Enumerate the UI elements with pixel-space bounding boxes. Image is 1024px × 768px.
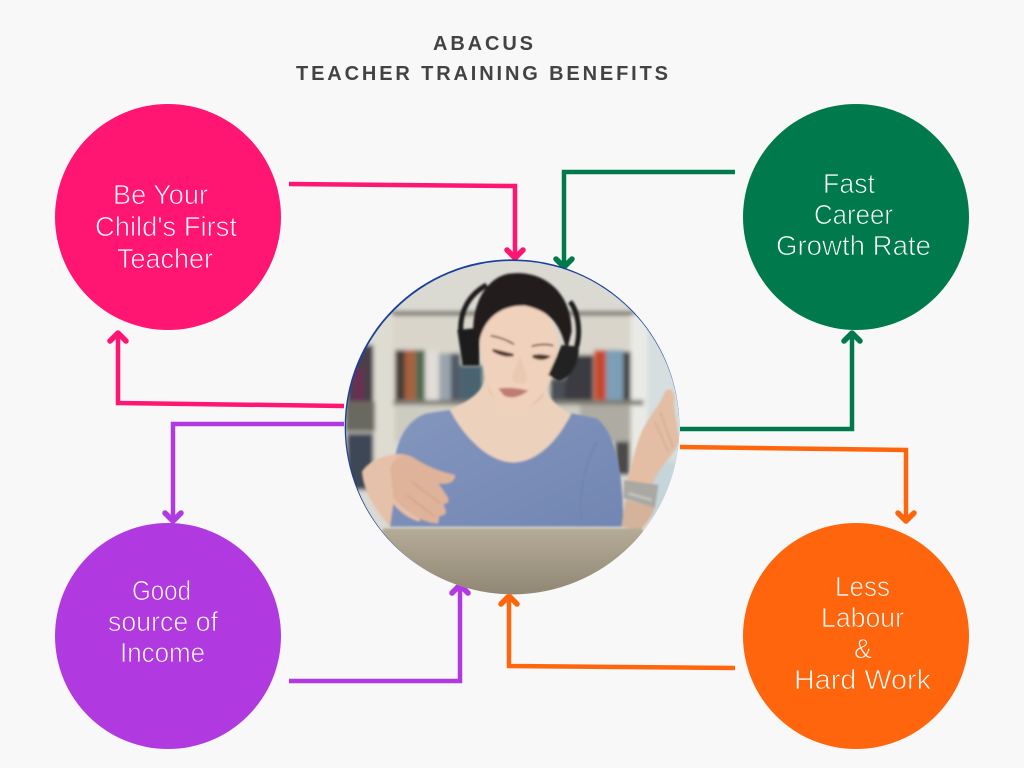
watch xyxy=(623,480,658,508)
left hand xyxy=(390,455,455,523)
arrow: purple from photo to income circle xyxy=(165,424,344,521)
photo: woman with headphones at laptop xyxy=(340,255,687,602)
title: ABACUS xyxy=(433,33,533,55)
chest and neck xyxy=(450,375,571,462)
circle: Less Labour & Hard Work: Less xyxy=(835,571,890,602)
laptop xyxy=(381,527,644,594)
circle: Less Labour & Hard Work: & xyxy=(854,633,872,664)
photo background: bookshelf xyxy=(340,255,687,600)
arrow: orange from photo to labour circle xyxy=(680,447,914,521)
left arm xyxy=(362,454,420,527)
circle: Good source of Income: source of xyxy=(108,606,218,637)
arrow: green from career circle to photo xyxy=(556,172,735,267)
sleeve fold xyxy=(581,442,597,522)
circle: Be Your Child's First Teacher xyxy=(55,104,281,330)
circle: Be Your Child's First Teacher: Child's First xyxy=(95,211,237,242)
circle: Fast Career Growth Rate xyxy=(743,104,969,330)
finger lines xyxy=(407,482,440,517)
arrow: pink from first circle to photo xyxy=(289,184,523,258)
arrow: orange from labour circle to photo xyxy=(501,596,735,668)
circle: Good source of Income: Income xyxy=(120,637,205,668)
arrow: green from photo to career circle xyxy=(680,333,860,429)
nose shade xyxy=(514,360,526,382)
circle: Fast Career Growth Rate: Career xyxy=(814,199,893,230)
circle: Be Your Child's First Teacher: Teacher xyxy=(117,243,213,274)
right hand and wrist xyxy=(627,389,679,487)
hair xyxy=(473,273,572,355)
circle: Less Labour & Hard Work: Labour xyxy=(821,602,904,633)
mouth xyxy=(498,388,528,397)
circle: Fast Career Growth Rate: Growth Rate xyxy=(776,230,931,261)
circle: Good source of Income xyxy=(55,523,281,749)
shirt xyxy=(390,410,623,527)
right fingers xyxy=(656,413,673,450)
face xyxy=(480,305,557,412)
arrow: pink from photo to first circle xyxy=(110,333,344,406)
circle: Fast Career Growth Rate: Fast xyxy=(823,168,875,199)
headphones xyxy=(461,285,579,347)
title xyxy=(296,33,668,85)
circle: Be Your Child's First Teacher: Be Your xyxy=(113,179,208,210)
circle: Less Labour & Hard Work xyxy=(743,523,969,749)
right forearm xyxy=(622,500,655,530)
eyes xyxy=(493,350,548,359)
circle: Less Labour & Hard Work: Hard Work xyxy=(794,664,932,695)
circle: Good source of Income: Good xyxy=(132,575,191,606)
title: TEACHER TRAINING BENEFITS xyxy=(296,63,668,85)
arrow: purple from income circle to photo xyxy=(289,585,468,681)
watch highlight xyxy=(628,493,652,500)
